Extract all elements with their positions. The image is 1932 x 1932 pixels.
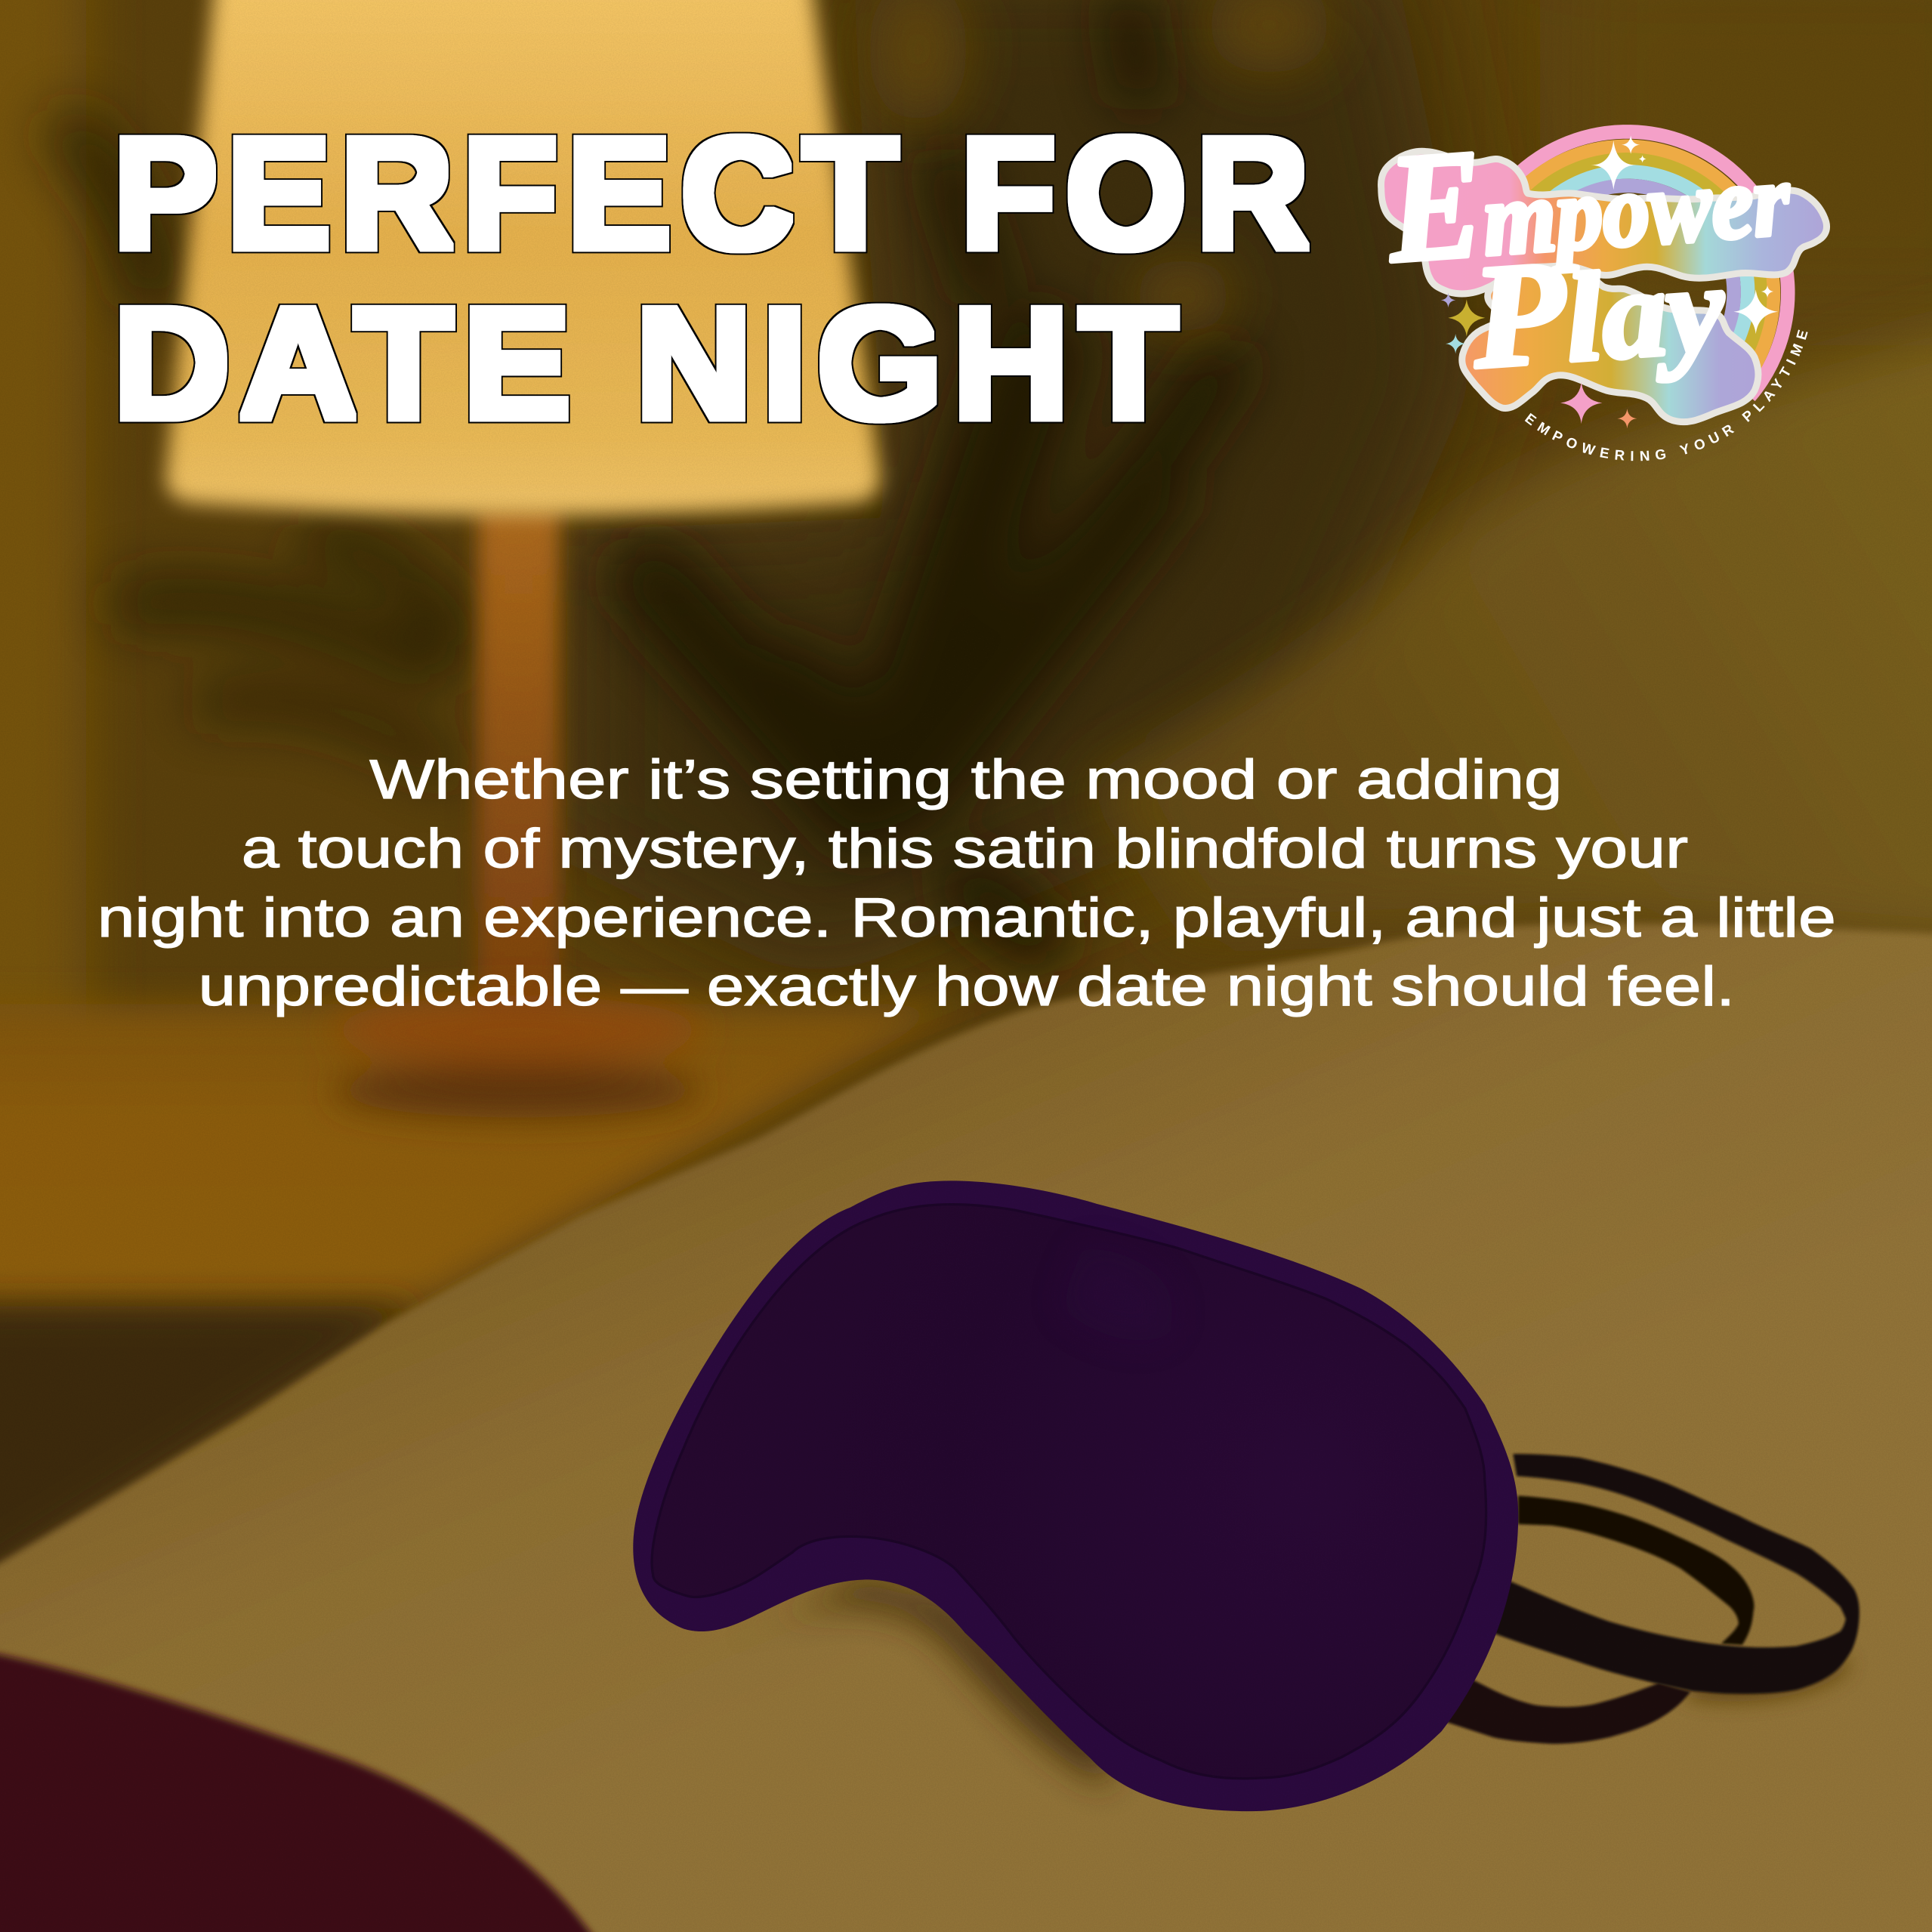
mask inner panel bbox=[652, 1205, 1486, 1779]
lamp shade bbox=[166, 0, 880, 515]
dark foliage mass bbox=[566, 0, 1479, 986]
elastic strap: lower band bbox=[1444, 1680, 1690, 1744]
body text: unpredictable — exactly how date night should feel. bbox=[199, 955, 1735, 1017]
logo: Empower Play bbox=[1378, 96, 1831, 461]
photo: satin eye mask with elastic straps bbox=[633, 1180, 1859, 1811]
light gaps in foliage bbox=[869, 0, 1331, 332]
bedside table bbox=[0, 1005, 961, 1309]
body text bbox=[97, 748, 1836, 1017]
title: PERFECT FOR bbox=[113, 106, 1319, 282]
logo wordmark: Empower: Empower bbox=[1381, 96, 1795, 295]
title: DATE NIGHT bbox=[113, 276, 1188, 452]
logo wordmark: Play: Play bbox=[1466, 219, 1730, 400]
body text: Whether it’s setting the mood or adding bbox=[369, 748, 1563, 810]
logo sparkles bbox=[1441, 135, 1778, 428]
logo sticker: Empower backing bbox=[1381, 151, 1827, 294]
palm leaves bbox=[653, 12, 1220, 937]
logo rainbow bbox=[1513, 131, 1788, 397]
logo tagline: EMPOWERING YOUR PLAYTIME bbox=[1524, 329, 1808, 461]
body text: night into an experience. Romantic, playful, and just a little bbox=[97, 887, 1836, 949]
title bbox=[113, 106, 1319, 452]
pillow bbox=[1085, 320, 1932, 949]
elastic strap: back inner bbox=[1518, 1495, 1754, 1645]
mask body bbox=[633, 1180, 1518, 1811]
elastic strap: outer loop and front band bbox=[1485, 1454, 1859, 1694]
logo sticker: Play backing bbox=[1462, 267, 1758, 422]
body text: a touch of mystery, this satin blindfold turns your bbox=[242, 817, 1688, 879]
mask shadow bbox=[727, 1577, 1109, 1786]
strap shadow bbox=[1688, 1657, 1848, 1702]
satin fold highlight bbox=[1060, 1245, 1173, 1341]
couch surface bbox=[0, 924, 1932, 1932]
lamp base bbox=[332, 995, 702, 1118]
lamp stem bbox=[478, 505, 560, 1035]
dark red blanket bbox=[0, 1645, 616, 1932]
left palm leaves bbox=[74, 135, 456, 764]
